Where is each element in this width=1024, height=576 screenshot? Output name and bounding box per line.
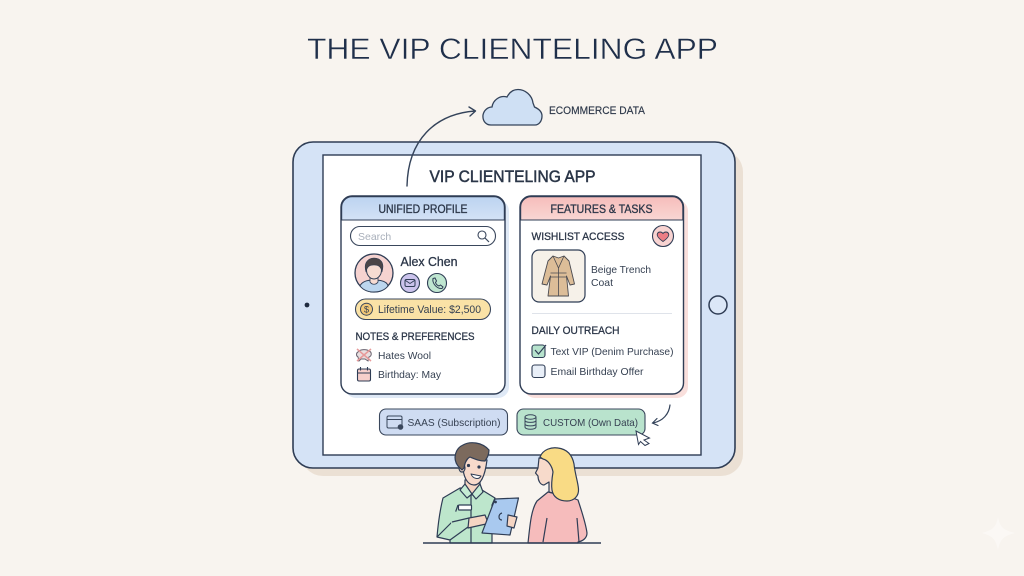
button: saas <box>380 409 508 435</box>
notes heading: NOTES & PREFERENCES <box>356 331 474 343</box>
man <box>437 443 518 543</box>
panel: features and tasks: Coat <box>591 277 613 289</box>
icon: cursor <box>636 431 650 446</box>
icon: calendar <box>358 367 370 381</box>
wishlist heading: WISHLIST ACCESS <box>532 231 624 243</box>
search bar: Search <box>358 231 391 243</box>
app heading: VIP CLIENTELING APP <box>430 168 596 186</box>
tablet screen <box>323 155 701 455</box>
note: birthday: Birthday: May <box>378 369 442 381</box>
woman <box>528 448 587 543</box>
tablet home button <box>709 296 727 314</box>
label: ecommerce data: ECOMMERCE DATA <box>549 105 646 117</box>
panel: features and tasks <box>520 196 688 398</box>
lifetime value pill <box>356 299 490 320</box>
unchecked task: Email Birthday Offer <box>550 366 644 378</box>
ground line <box>423 542 601 544</box>
daily outreach heading: DAILY OUTREACH <box>532 325 620 337</box>
tablet camera <box>305 303 309 307</box>
search bar <box>350 226 496 246</box>
avatar <box>355 254 393 292</box>
icon: phone <box>428 274 446 292</box>
profile heading: UNIFIED PROFILE <box>378 204 468 216</box>
icon: hates wool <box>356 349 371 361</box>
arrow to cloud <box>407 107 476 186</box>
features heading: FEATURES & TASKS <box>550 204 653 216</box>
lifetime value pill: Lifetime Value: $2,500 <box>378 304 481 316</box>
people illustration <box>423 443 601 543</box>
panel: unified profile <box>341 196 509 398</box>
title: THE VIP CLIENTELING APP <box>307 33 718 66</box>
watermark sparkle <box>982 517 1015 550</box>
button: saas: SAAS (Subscription) <box>408 417 500 429</box>
product thumbnail: trench coat <box>532 250 585 302</box>
icon: cloud <box>483 90 542 125</box>
icon: email <box>400 274 420 292</box>
small arrow to custom <box>652 405 670 426</box>
product name: Beige Trench <box>591 264 651 276</box>
customer name: Alex Chen <box>400 255 458 269</box>
note: hates wool: Hates Wool <box>378 350 431 362</box>
button: custom: CUSTOM (Own Data) <box>543 417 638 429</box>
checked task: Text VIP (Denim Purchase) <box>550 346 674 358</box>
lifetime value pill: $ <box>364 304 369 314</box>
button: custom <box>517 409 645 435</box>
tablet <box>293 142 743 476</box>
icon: heart <box>652 226 674 246</box>
